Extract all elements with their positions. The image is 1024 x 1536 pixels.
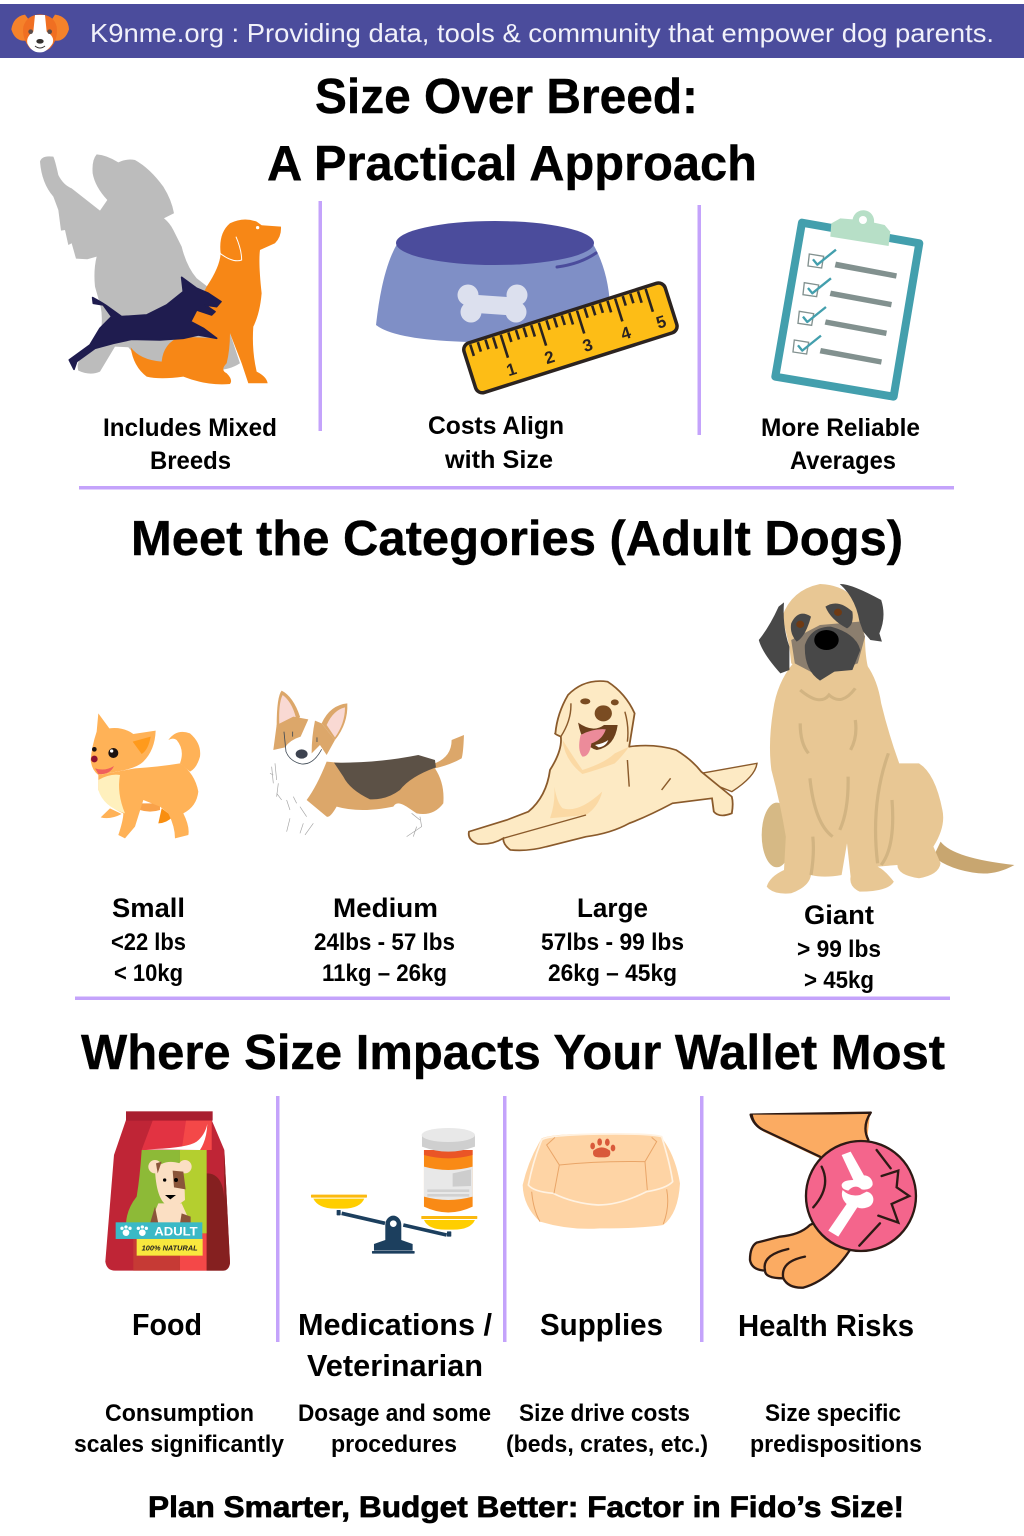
category: medium: 24lbs - 57 lbs: [314, 929, 455, 956]
caption: food: Food: [132, 1307, 202, 1342]
caption: medications / veterinarian: Veterinarian: [307, 1348, 483, 1383]
icon: dog bowl and ruler: [376, 221, 679, 395]
category: medium: Medium: [333, 893, 438, 923]
caption: more reliable averages: [761, 414, 920, 475]
caption: includes mixed breeds: Includes Mixed: [103, 414, 277, 442]
icon: large dog golden retriever: [469, 681, 757, 850]
category: medium: 11kg – 26kg: [322, 960, 447, 987]
category: giant: > 45kg: [804, 967, 874, 994]
description: health risks: [750, 1400, 922, 1458]
category: small: < 10kg: [114, 960, 183, 987]
category: small: [111, 893, 186, 987]
category: large: 26kg – 45kg: [548, 960, 677, 987]
icon: medium dog corgi: [270, 691, 464, 837]
description: medications: [298, 1400, 491, 1458]
ruler: 1: [504, 359, 519, 380]
caption: includes mixed breeds: [103, 414, 277, 475]
caption: medications / veterinarian: [298, 1307, 492, 1383]
heading: meet the categories: Meet the Categories (Adult Dogs): [131, 512, 903, 566]
category: large: Large: [577, 893, 648, 923]
icon: three dog silhouettes: [40, 154, 281, 384]
caption: supplies: Supplies: [540, 1307, 663, 1342]
caption: includes mixed breeds: Breeds: [150, 447, 231, 475]
header banner: [0, 4, 1024, 58]
ruler: 2: [542, 347, 557, 368]
description: supplies: Size drive costs: [519, 1400, 690, 1427]
caption: costs align with size: with Size: [444, 446, 553, 474]
icon: dog face logo: [11, 14, 69, 52]
title: [267, 70, 757, 191]
category: giant: [797, 900, 881, 994]
category: small: <22 lbs: [111, 929, 186, 956]
heading: wallet impact: Where Size Impacts Your Wallet Most: [81, 1026, 945, 1080]
caption: health risks: Health Risks: [738, 1308, 914, 1343]
category: large: 57lbs - 99 lbs: [541, 929, 684, 956]
icon: dog food bag: ADULT: [154, 1225, 198, 1239]
header tagline: K9nme.org : Providing data, tools & community that empower dog parents.: [90, 18, 994, 48]
description: food: [74, 1400, 285, 1458]
category: giant: Giant: [804, 900, 874, 930]
category: medium: [314, 893, 455, 987]
caption: more reliable averages: More Reliable: [761, 414, 920, 442]
description: supplies: (beds, crates, etc.): [506, 1431, 708, 1458]
icon: small dog chihuahua: [91, 713, 200, 838]
description: medications: Dosage and some: [298, 1400, 491, 1427]
category: small: Small: [112, 893, 185, 923]
category: large: [541, 893, 684, 987]
description: food: scales significantly: [74, 1431, 285, 1458]
caption: costs align with size: Costs Align: [428, 412, 564, 440]
description: health risks: Size specific: [765, 1400, 901, 1427]
description: food: Consumption: [105, 1400, 254, 1427]
ruler: 5: [654, 312, 669, 333]
description: supplies: [506, 1400, 708, 1458]
title: A Practical Approach: [267, 137, 757, 191]
footer tagline: Plan Smarter, Budget Better: Factor in Fido’s Size!: [148, 1491, 904, 1524]
category: giant: > 99 lbs: [797, 936, 881, 963]
ruler: 3: [580, 335, 595, 356]
icon: paw with joint x-ray: [750, 1113, 916, 1288]
icon: dog bed: [523, 1134, 680, 1229]
caption: medications / veterinarian: Medications /: [298, 1307, 492, 1342]
caption: more reliable averages: Averages: [790, 447, 896, 475]
ruler: [462, 281, 679, 395]
icon: dog food bag: [105, 1111, 230, 1271]
icon: clipboard checklist: [775, 210, 919, 397]
icon: giant dog mastiff: [759, 584, 1014, 894]
icon: dog food bag: 100% NATURAL: [142, 1244, 198, 1253]
ruler: 4: [619, 323, 634, 344]
title: Size Over Breed:: [315, 70, 698, 124]
caption: costs align with size: [428, 412, 564, 474]
description: medications: procedures: [331, 1431, 457, 1458]
description: health risks: predispositions: [750, 1431, 922, 1458]
icon: medication bottle on scale: [311, 1128, 477, 1254]
